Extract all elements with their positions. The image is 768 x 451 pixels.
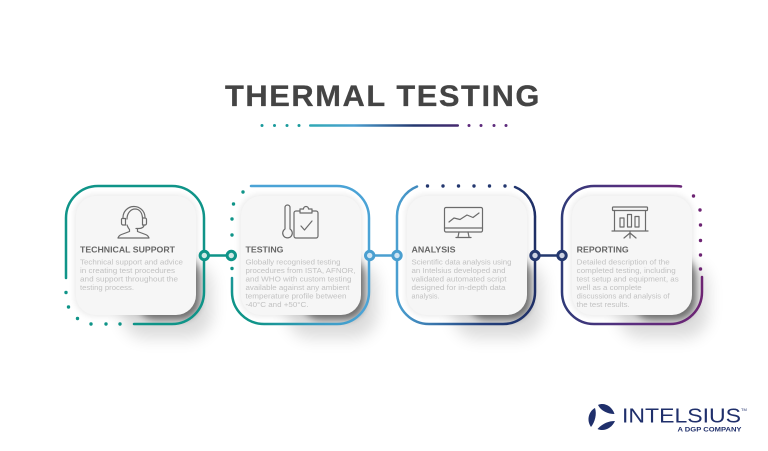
outline dots bbox=[692, 194, 702, 271]
body text: completed testing, including bbox=[577, 266, 676, 275]
panel: testing bbox=[230, 186, 377, 338]
icon: monitor with line chart bbox=[444, 208, 482, 238]
heading: ANALYSIS bbox=[412, 244, 456, 254]
card face bbox=[407, 196, 527, 315]
body text: -40°C and +50°C. bbox=[246, 300, 308, 309]
panel: analysis bbox=[397, 184, 543, 338]
body text: the test results. bbox=[577, 300, 630, 309]
logo mark bbox=[588, 404, 615, 430]
logo tagline: A DGP COMPANY bbox=[678, 426, 742, 434]
body text: test setup and equipment, as bbox=[577, 274, 679, 284]
panel: technical support bbox=[64, 186, 212, 338]
body text: testing process. bbox=[80, 283, 134, 292]
heading: REPORTING bbox=[577, 244, 629, 254]
logo: Intelsius bbox=[588, 404, 747, 434]
body text bbox=[80, 258, 183, 292]
body text: temperature profile between bbox=[246, 292, 346, 300]
card outline bbox=[232, 186, 369, 324]
logo wordmark: INTELSIUS bbox=[622, 404, 741, 428]
outline dots bbox=[230, 190, 245, 270]
card outline bbox=[66, 186, 204, 324]
body text bbox=[576, 258, 679, 309]
icon: thermometer and clipboard bbox=[283, 205, 318, 238]
body text: in creating test procedures bbox=[80, 266, 175, 275]
card face bbox=[76, 196, 196, 315]
card face bbox=[572, 196, 692, 315]
body text: designed for in-depth data bbox=[412, 283, 506, 292]
connector: testing to analysis bbox=[366, 251, 401, 260]
title: THERMAL TESTING bbox=[225, 80, 541, 113]
body text: Scientific data analysis using bbox=[412, 258, 512, 266]
trademark: TM bbox=[741, 407, 747, 412]
body text: discussions and analysis of bbox=[577, 292, 671, 300]
heading: TECHNICAL SUPPORT bbox=[80, 244, 175, 254]
body text: available against any ambient bbox=[246, 283, 350, 292]
heading: TESTING bbox=[246, 244, 284, 254]
body text: analysis. bbox=[412, 292, 440, 300]
body text: an Intelsius developed and bbox=[412, 266, 506, 275]
body text bbox=[246, 258, 356, 309]
body text: validated automated script bbox=[412, 274, 507, 284]
outline dots bbox=[426, 184, 507, 188]
title divider bbox=[260, 124, 508, 127]
body text: Globally recognised testing bbox=[246, 258, 340, 266]
connector: analysis to reporting bbox=[531, 251, 566, 260]
card face bbox=[241, 196, 361, 315]
body text: Technical support and advice bbox=[80, 258, 183, 266]
body text: procedures from ISTA, AFNOR, bbox=[246, 266, 356, 275]
outline dots bbox=[64, 291, 122, 326]
card outline bbox=[562, 186, 702, 324]
connector: support to testing bbox=[200, 251, 236, 260]
body text: and WHO with custom testing bbox=[246, 274, 352, 284]
body text bbox=[412, 258, 512, 300]
body text: and support throughout the bbox=[80, 274, 178, 284]
icon: headset operator bbox=[118, 206, 149, 238]
panel: reporting bbox=[562, 186, 708, 338]
card outline bbox=[397, 186, 535, 324]
body text: well as a complete bbox=[576, 283, 642, 292]
body text: Detailed description of the bbox=[577, 258, 670, 266]
icon: presentation board bbox=[612, 207, 648, 238]
